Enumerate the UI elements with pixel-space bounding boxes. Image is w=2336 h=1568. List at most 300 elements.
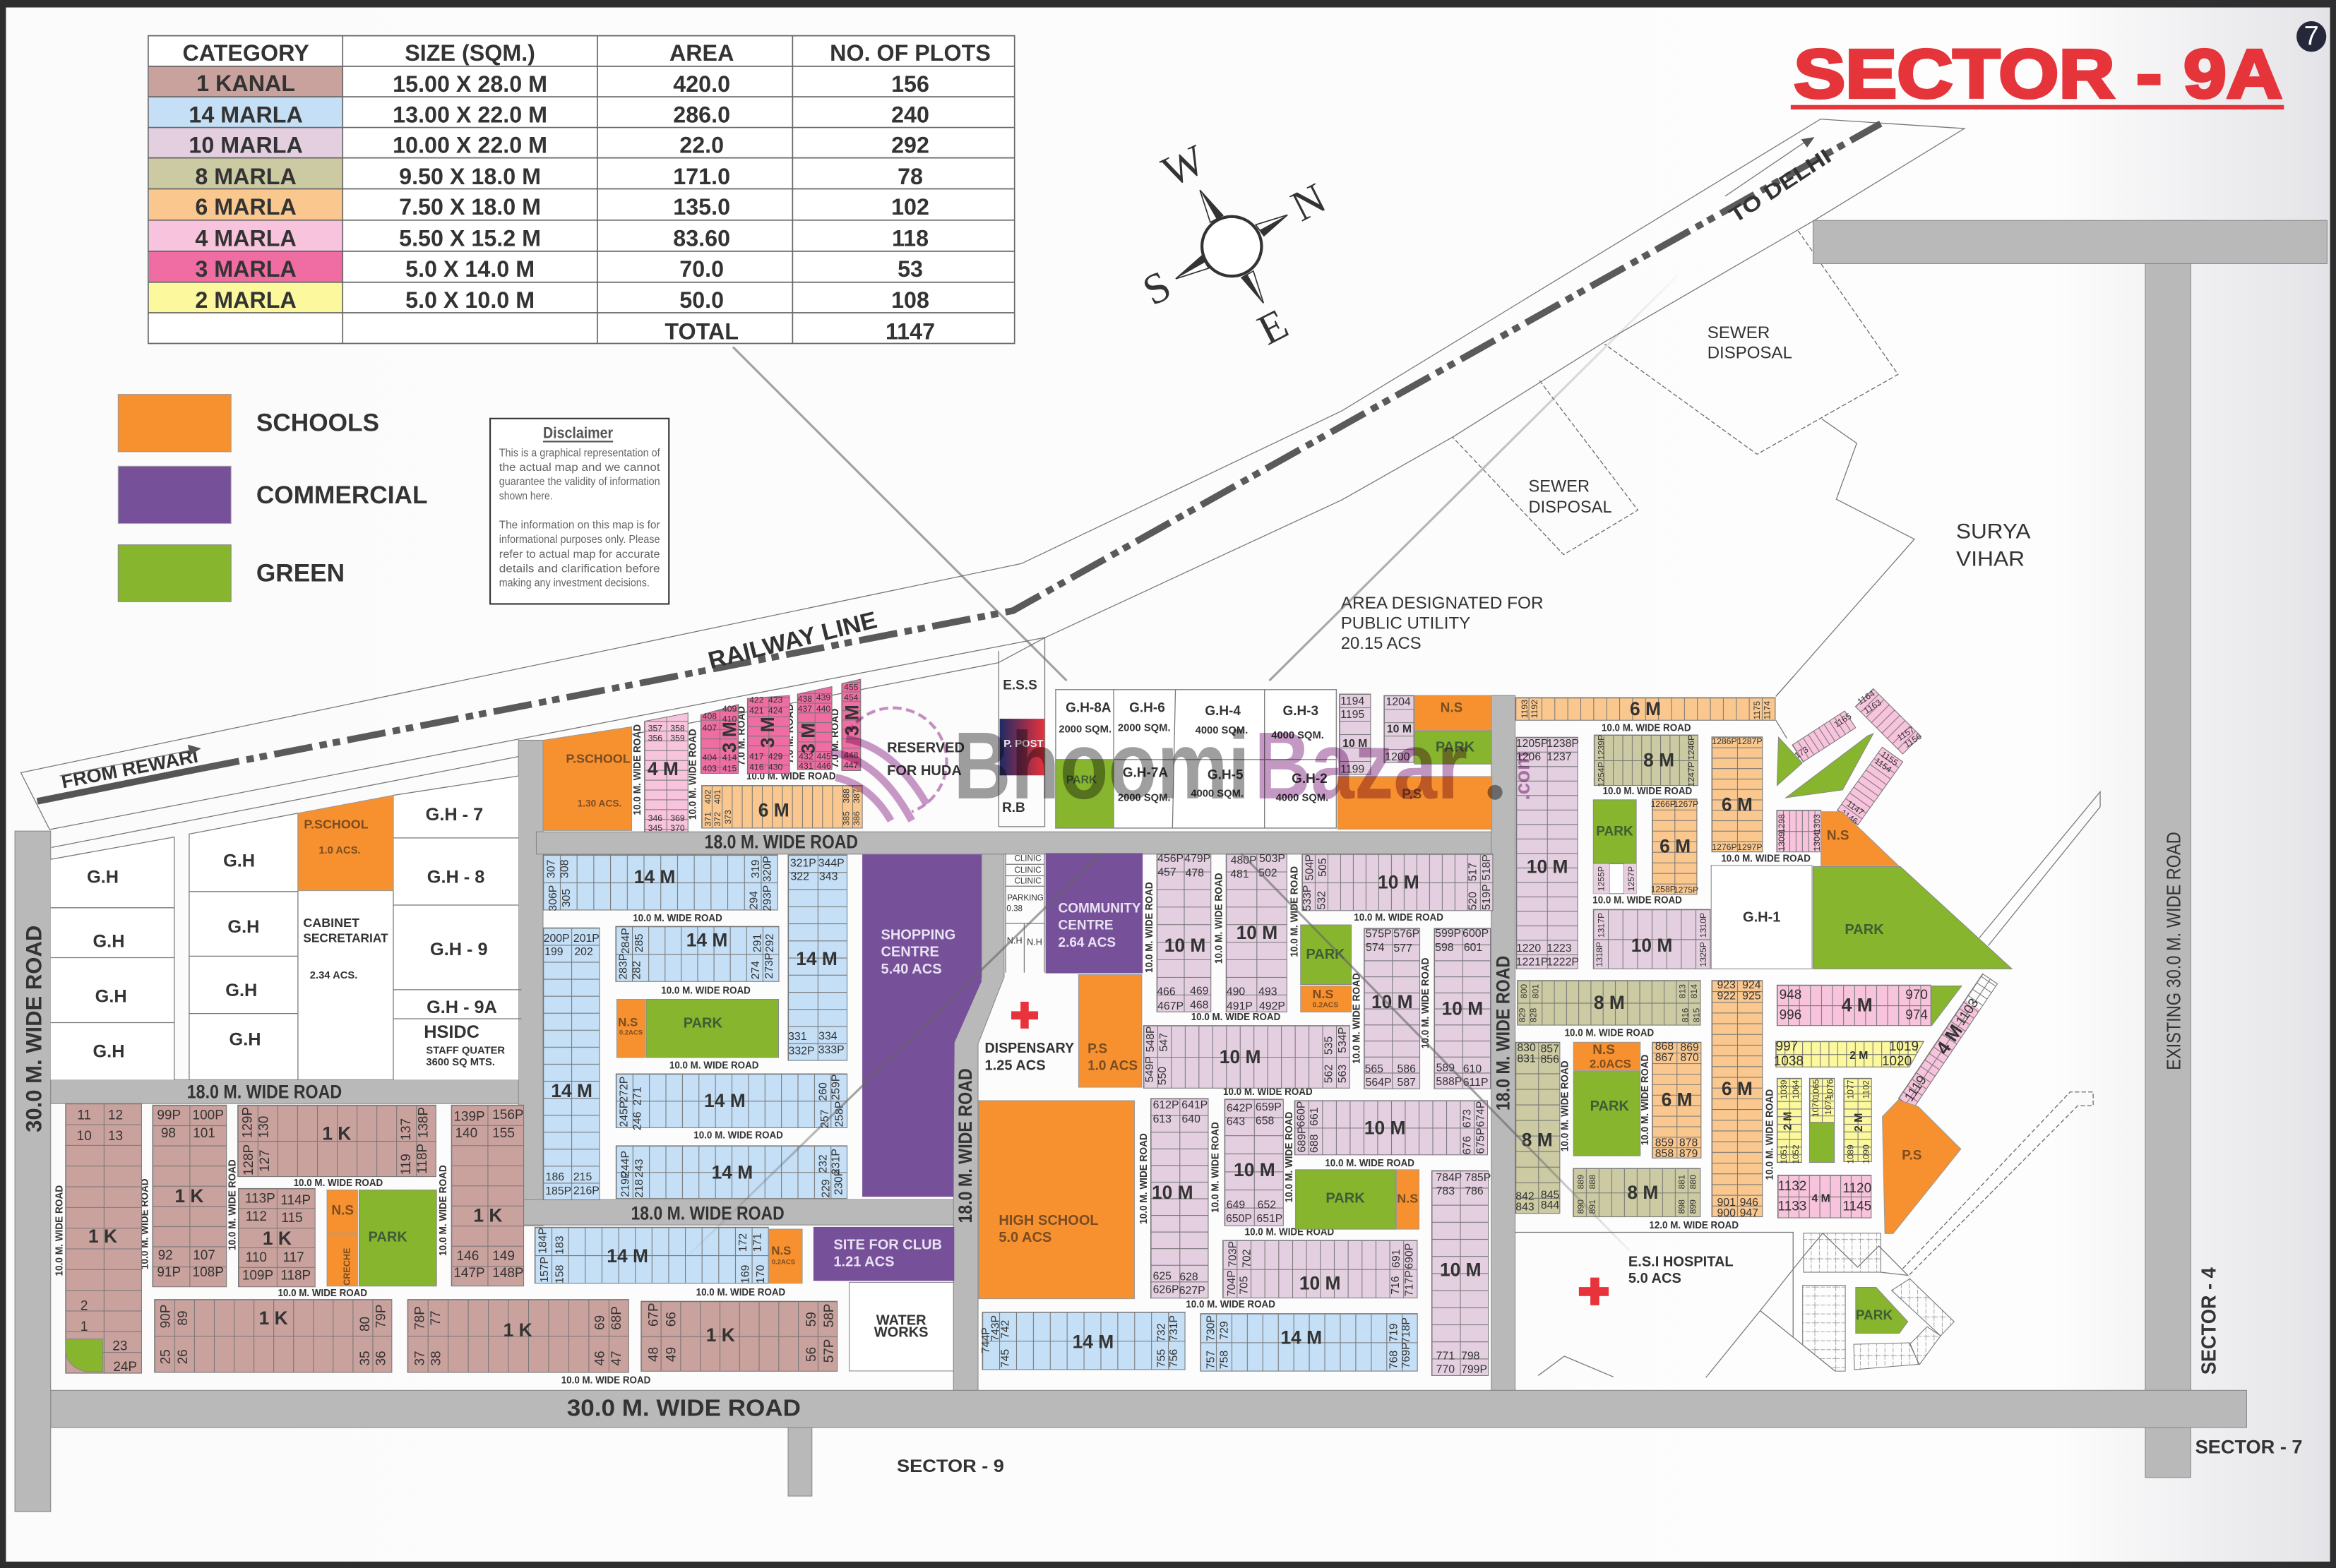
slanted 4 marla strip: 1103 [1953,996,1982,1028]
park and nursery school south central: PARK [1325,1191,1365,1207]
2 marla columns and small green: 2 M [1782,1112,1794,1130]
6 marla block 868: 858 [1655,1148,1674,1160]
10 marla block i: 10 M [1364,1117,1405,1138]
1 kanal plots block D: 110 [246,1250,267,1265]
slanted 4 marla plots north-east: 1163 [1862,698,1883,716]
sewer disposal zones: DISPOSAL [1708,343,1792,362]
4 marla block 1132: 4 M [1811,1193,1830,1205]
1 kanal plots row F: 90P [159,1305,174,1328]
3 marla blocks: 3 M [798,723,819,754]
14 marla block right: 344P [818,858,845,870]
plot category table: 78 [898,164,923,189]
1 kanal plots block E: 147P [453,1266,485,1281]
10 marla block e: 589 [1436,1063,1455,1075]
10 marla block h: 10 M [1234,1159,1275,1180]
1 kanal plots west column: 23 [112,1339,127,1354]
3 marla blocks: 414 [722,753,737,762]
4 marla block north: 345 [648,823,662,833]
10 marla block d: 564P [1366,1077,1392,1089]
6 marla tall block 923: 946 [1740,1197,1758,1209]
8 marla block north-east: 1254P [1597,762,1607,786]
3 marla blocks: 403 [703,764,717,774]
10 marla block b: 491P [1227,1000,1253,1012]
14 marla block middle two: 259P [830,1075,842,1100]
small 10 m road labels: 10.0 M. WIDE ROAD [1138,1133,1150,1224]
shopping centre [862,854,982,1197]
14 marla block right: 322 [790,871,809,883]
14 marla bottom block m [1200,1314,1417,1371]
primary school 1.0 acres [1078,975,1142,1087]
4 marla row 948 with green wedge: 948 [1780,988,1801,1003]
10 marla block c [1301,854,1493,911]
8 marla row 889: 888 [1587,1175,1597,1189]
small 10 m road labels: 10.0 M. WIDE ROAD [1640,1055,1651,1145]
3 marla blocks: 407 [703,723,717,733]
10 marla block a: 10 M [1164,935,1205,956]
label: Surya Vihar [1956,520,2031,571]
plot category table: 5.0 X 14.0 M [405,256,535,282]
group housing west blocks: G.H [230,1030,261,1050]
3 marla blocks: 431 [799,761,814,771]
14 marla block middle two: 272P [618,1077,630,1103]
10 marla block c: 519P [1481,884,1493,910]
road labels: 18.0 M. WIDE ROAD [955,1068,976,1223]
2 marla columns and small green: 1089 [1846,1144,1856,1164]
small 10 m road labels: 10.0 M. WIDE ROAD [1325,1158,1414,1169]
14 marla block left: 200P [544,933,570,945]
6 marla top row east: 1193 [1520,700,1530,718]
10 marla block 1317 [1593,909,1710,969]
3 marla blocks: 3 M [757,717,778,748]
primary school 1.0 acres: P.S [1087,1041,1107,1056]
6 marla tall block 923: 6 M [1722,1078,1753,1099]
plot category table: 15.00 X 28.0 M [393,71,547,97]
10 marla block a [1157,853,1211,1012]
6 marla top row east [1515,698,1775,720]
slanted 4 marla strip: 1119 [1902,1073,1930,1104]
10 marla block 1317: 1317P [1597,913,1607,938]
1 kanal plots row F: 25 [159,1349,174,1364]
small 10 m road labels: 12.0 M. WIDE ROAD [1649,1220,1739,1231]
10 marla block g: 641P [1181,1099,1208,1111]
10 marla block 1317: 1325P [1698,942,1708,967]
1 kanal plots row F: 26 [176,1349,191,1364]
10 marla block e: 10 M [1442,998,1483,1019]
small 10 m road labels: 10.0 M. WIDE ROAD [294,1178,383,1189]
4 marla block north: 4 M [648,758,679,779]
14 marla bottom block m: 757 [1205,1351,1217,1369]
clinics, parking and N.H block: 0.38 [1006,904,1023,913]
slanted 4 marla plots north-east: 1146 [1839,808,1859,827]
primary school north: 1.30 ACS. [578,798,621,809]
10 marla block e: 599P [1435,928,1461,940]
3 marla blocks [701,679,863,774]
8 marla row 889: 881 [1676,1175,1686,1189]
14 marla block top: 293P [762,885,774,911]
2 marla columns and small green: 1090 [1861,1144,1871,1164]
10 marla block f: 549P [1144,1056,1156,1082]
10 marla block f: 548P [1145,1026,1157,1052]
1 kanal plots block D: 109P [242,1268,273,1283]
small 10 m road labels: 10.0 M. WIDE ROAD [633,913,722,924]
N.S, park and P.S north-east: P.S [1402,787,1422,802]
1 kanal plots west column: 24P [113,1360,137,1375]
1 kanal plots block C: 137 [399,1118,414,1141]
14 marla bottom block l: 743P [990,1315,1002,1341]
1 kanal plots block C: 119 [399,1154,414,1175]
14 marla block top: 319 [750,859,762,878]
1 kanal plots row H: 57P [822,1339,837,1363]
small 10 m road labels: 10.0 M. WIDE ROAD [1191,1012,1280,1023]
2 marla columns and small green [1777,1078,1871,1164]
1 kanal plots west column: 1 [81,1319,88,1334]
nursery school 0.2 acres [769,1229,802,1283]
title: Sector 9A: SECTOR - 9A [1794,35,2282,112]
4 marla small block 1298 [1777,810,1822,852]
14 marla bottom block m: 758 [1219,1351,1231,1369]
14 marla block top: 14 M [634,866,675,887]
10 marla block i [1294,1101,1488,1155]
10 marla block e: 610 [1463,1063,1482,1075]
14 marla block middle one: 285 [633,933,645,952]
2 marla row 997: 1038 [1774,1054,1804,1069]
14 marla bottom block l: 732 [1155,1323,1167,1342]
small 10 marla blocks by N.S: 1194 [1340,695,1364,707]
road labels: 30.0 M. WIDE ROAD [567,1395,801,1422]
14 marla block top: 306P [547,885,559,911]
plot category table [148,36,1015,344]
shopping centre: 5.40 ACS [881,962,942,977]
1 kanal plots block D: 114P [280,1193,311,1208]
3 marla blocks: 448 [844,750,859,760]
10 marla block d: 575P [1366,928,1392,940]
nursery school and central park: N.S [618,1016,638,1029]
10 marla block east: 1222P [1547,956,1579,968]
14 marla bottom block l: 756 [1168,1349,1180,1367]
group housing west blocks: G.H [223,851,255,870]
plot category table: 70.0 [679,256,724,282]
label: reserved for HUDA [887,741,965,779]
14 marla block left: 202 [574,946,593,958]
14 marla block middle two [616,1074,847,1130]
10 marla block c: 518P [1481,854,1493,880]
small 10 m road labels: 10.0 M. WIDE ROAD [1289,866,1301,957]
plot category table: 5.0 X 10.0 M [405,287,535,313]
group housing west blocks: G.H [225,981,257,1000]
14 marla block below road: 157P [539,1257,551,1283]
small 10 m road labels: 7.0 M. ROAD [785,704,796,763]
4 marla block 1132 [1777,1175,1871,1218]
10 marla block f: 535 [1323,1036,1335,1055]
3 marla blocks: 415 [722,764,737,774]
10 marla block east: 1221P [1516,956,1548,968]
primary school west: P.SCHOOL [304,818,369,832]
14 marla block left: 199 [544,946,564,958]
nursery school, creche and park: CRECHE [342,1248,352,1286]
8 marla row 800: 813 [1677,984,1687,998]
road labels [21,831,2185,1422]
2 marla row 997: 2 M [1849,1050,1868,1062]
10 marla block 1317: 1310P [1698,913,1708,938]
1 kanal plots row F: 36 [374,1351,389,1366]
1 kanal plots row G: 78P [412,1306,427,1330]
disclaimer box: guarantee the validity of information [499,475,660,488]
10 marla block east: 1220 [1516,942,1541,954]
10 marla block j: 10 M [1299,1273,1340,1294]
14 marla bottom block m: 718P [1400,1317,1412,1343]
6 marla block 1286: 1286P [1712,736,1737,746]
2 marla columns and small green: 1076 [1825,1079,1835,1099]
4 marla block 1132: 1132 [1778,1179,1806,1194]
group housing central row: 2000 SQM. [1118,723,1171,734]
8 marla row 800: 815 [1692,1008,1702,1022]
6 marla block 868 [1652,1041,1701,1160]
E.S.S, post office and R.B column: R.B [1002,801,1025,815]
6 marla block 868: 878 [1679,1137,1698,1149]
10 marla block i: 674P [1475,1101,1487,1127]
icon: compass rose: E [1250,299,1296,354]
10 marla block d: 586 [1398,1063,1416,1075]
10 marla block i: 673 [1462,1109,1474,1128]
14 marla block middle three: 244P [620,1151,632,1177]
nursery school and central park: PARK [684,1015,723,1031]
community centre [1046,853,1143,974]
10 marla block b: 480P [1231,855,1257,867]
1 kanal plots row G: 37 [412,1351,427,1366]
14 marla block right [788,855,847,1060]
group housing G.H-1: G.H-1 [1743,910,1780,926]
clinics, parking and N.H block: CLINIC [1014,876,1041,885]
10 marla block f [1143,1026,1349,1088]
14 marla block below road: 14 M [607,1245,648,1267]
small 10 m road labels: 10.0 M. WIDE ROAD [278,1288,367,1299]
14 marla block below road: 170 [755,1264,767,1283]
plot category table: 240 [891,102,929,127]
8 marla row 889: 880 [1688,1175,1698,1189]
plot category table: CATEGORY [182,40,309,66]
8 marla row 800: 828 [1529,1008,1539,1022]
group housing west blocks [51,776,521,1079]
plot category table: NO. OF PLOTS [830,40,991,66]
slanted 4 marla plots north-east: 1173 [1789,744,1811,762]
1 kanal plots row H [641,1301,838,1371]
14 marla block middle two: 245P [618,1101,630,1127]
sewer disposal zones: SEWER [1708,323,1770,342]
nursery school, creche and park [327,1190,436,1286]
small 10 m road labels: 10.0 M. WIDE ROAD [1351,973,1362,1064]
2 marla columns and small green: 1065 [1811,1079,1821,1099]
group housing central row: G.H-6 [1129,700,1165,715]
10 marla block k [1431,1171,1491,1375]
10 marla block h: 652 [1258,1199,1276,1211]
road labels: EXISTING 30.0 M. WIDE ROAD [2163,832,2185,1070]
6 marla block 868: 869 [1680,1041,1699,1053]
6 marla block 1266: 1258P [1651,884,1676,894]
8 marla row 889: 890 [1575,1199,1585,1214]
14 marla block below road [535,1227,768,1283]
1 kanal plots row G: 77 [429,1310,443,1326]
neighbouring sector labels: SECTOR - 4 [2198,1267,2221,1375]
14 marla block middle two: 257 [819,1110,831,1128]
primary school west: 1.0 ACS. [318,845,361,856]
14 marla block left: 186 [546,1171,564,1183]
1 kanal plots west column: 13 [108,1129,123,1144]
6 marla block 1286: 1287P [1737,736,1763,746]
14 marla block middle three: 14 M [712,1161,753,1183]
community centre: 2.64 ACS [1059,935,1116,950]
E.S.I hospital area [1515,1232,1835,1377]
14 marla block right: 14 M [796,948,838,969]
unallotted plot outlines south-east [1803,1233,1954,1371]
10 marla block east: 10 M [1527,856,1568,877]
road labels: 18.0 M. WIDE ROAD [1492,956,1513,1111]
10 marla block k: 770 [1436,1363,1455,1375]
park and nursery school south central [1296,1170,1419,1229]
2 marla columns and small green: 1064 [1791,1079,1801,1099]
green wedges north-east [1777,734,1873,798]
group housing central row: G.H-7A [1123,765,1168,780]
small 10 m road labels: 10.0 M. WIDE ROAD [1144,882,1155,973]
6 marla tall block 923: 947 [1740,1207,1758,1219]
10 marla block 1317: 1318P [1595,942,1604,967]
group housing west blocks: G.H - 7 [426,805,483,825]
4 marla block north: 358 [670,724,685,734]
10 marla block e: 611P [1463,1077,1489,1089]
3 marla blocks: 430 [768,762,782,772]
1 kanal plots row F [155,1300,392,1372]
14 marla block right: 334 [818,1031,838,1043]
plot category table: 7.50 X 18.0 M [399,194,541,220]
6 marla block north: 6 M [758,800,789,821]
6 marla block 868: 879 [1679,1148,1698,1160]
disclaimer box: The information on this map is for [499,519,660,532]
4 marla row 948 with green wedge: 996 [1780,1007,1801,1022]
6 marla block north [702,786,862,828]
14 marla block middle three: 232 [818,1154,830,1173]
plot category table: 5.50 X 15.2 M [399,226,541,251]
2 marla row 997 [1774,1039,1924,1069]
14 marla block top: 307 [546,860,558,878]
disclaimer box: details and clarification before [499,562,660,575]
14 marla block middle one: 273P [763,952,775,978]
high school: HIGH SCHOOL [999,1213,1099,1228]
3 marla blocks: 439 [816,693,830,702]
1 kanal plots block B [153,1105,227,1287]
label: reserved for HUDA: FOR HUDA [887,763,962,779]
small 10 m road labels: 10.0 M. WIDE ROAD [1592,894,1682,906]
1 kanal plots row G: 69 [593,1315,608,1330]
10 marla block c: 505 [1317,858,1329,877]
slanted 4 marla plots north-east: 1154 [1873,756,1894,774]
small 10 m road labels: 10.0 M. WIDE ROAD [1214,873,1225,964]
small 10 m road labels: 10.0 M. WIDE ROAD [227,1159,239,1250]
10 marla block g: 613 [1153,1113,1172,1125]
6 marla top row east: 1174 [1762,701,1772,719]
14 marla block top [543,855,777,911]
sewer disposal zones: SEWER [1529,477,1590,496]
4 marla block north: 357 [648,724,662,734]
group housing central row: 2000 SQM. [1118,793,1171,804]
6 marla tall block 923: 922 [1717,991,1736,1003]
shopping centre: CENTRE [881,945,939,960]
10 marla block c: 517 [1467,863,1479,881]
10 marla block b: 481 [1230,868,1249,880]
1 kanal plots row H: 66 [664,1312,679,1327]
community centre: COMMUNITY [1059,901,1141,916]
small 10 m road labels: 10.0 M. WIDE ROAD [561,1375,650,1387]
disclaimer box: This is a graphical representation of [499,446,660,459]
14 marla block middle one: 291 [751,933,763,952]
8 marla row 800 [1517,981,1702,1025]
group housing west blocks: G.H [93,1041,125,1061]
4 marla small block 1298: 1303 [1812,814,1822,833]
14 marla block below road: 172 [737,1233,749,1252]
14 marla block below road: 158 [554,1264,566,1283]
small 10 m road labels: 10.0 M. WIDE ROAD [1420,957,1431,1048]
water works [850,1282,953,1371]
14 marla block top: 308 [559,859,571,878]
group housing west blocks: G.H - 8 [427,868,484,887]
1 kanal plots block B: 99P [157,1108,181,1123]
primary school 1.0 acres: 1.0 ACS [1087,1059,1138,1074]
group housing central row: 4000 SQM. [1196,725,1248,736]
public utility boundary and label [1341,419,1914,696]
4 marla block 1132: 1133 [1778,1199,1806,1214]
small 10 m road labels: 10.0 M. WIDE ROAD [1764,1089,1775,1180]
6 marla top row east: 1192 [1530,700,1539,718]
disclaimer box: the actual map and we cannot [499,461,660,474]
small 10 m road labels [54,704,1811,1387]
1 kanal plots row H: 58P [822,1304,837,1327]
1 kanal plots row G: 68P [609,1306,624,1330]
legend: schools, commercial, green: GREEN [256,560,345,587]
group housing west blocks: STAFF QUATER [426,1045,505,1056]
10 marla block d: 577 [1394,942,1412,954]
8 marla column 830: 830 [1517,1042,1536,1054]
small 10 m road labels: 10.0 M. WIDE ROAD [1186,1299,1275,1310]
10 marla block i: 660P [1295,1101,1307,1127]
8 marla row 800: 8 M [1594,992,1625,1013]
3 marla blocks: 454 [844,693,859,702]
small 10 m road labels: 10.0 M. WIDE ROAD [1284,1112,1295,1202]
6 marla block north: 401 [713,789,722,804]
small 10 m road labels: 10.0 M. WIDE ROAD [693,1130,783,1141]
10 marla block k: 784P [1436,1172,1462,1184]
nursery school 2.0 acres and park [1573,1042,1640,1156]
10 marla block i: 675P [1475,1127,1487,1154]
diagonal scan crease lines [689,275,1678,1255]
10 marla block f: 550 [1157,1067,1169,1085]
4 marla row 948 with green wedge: 974 [1905,1007,1928,1022]
14 marla bottom block l [980,1312,1185,1370]
14 marla bottom block m: 768 [1388,1351,1400,1369]
10 marla block g: 626P [1153,1284,1179,1296]
14 marla block middle three: 230P [833,1169,845,1195]
6 marla top row east: 1175 [1752,701,1762,719]
8 marla column 830: 845 [1541,1190,1560,1202]
small 10 m road labels: 10.0 M. WIDE ROAD [1565,1027,1654,1039]
8 marla row 800: 800 [1519,984,1529,998]
group housing west blocks: G.H [87,868,119,887]
14 marla bottom block m: 730P [1205,1315,1217,1341]
8 marla row 889: 898 [1676,1199,1686,1214]
site for club [814,1227,954,1281]
group housing central row: 4000 SQM. [1191,788,1244,799]
1 kanal plots block E: 1 K [473,1204,502,1226]
6 marla block north: 371 [703,812,713,826]
14 marla block middle three: 229 [820,1179,832,1198]
8 marla column 830: 831 [1517,1053,1536,1065]
